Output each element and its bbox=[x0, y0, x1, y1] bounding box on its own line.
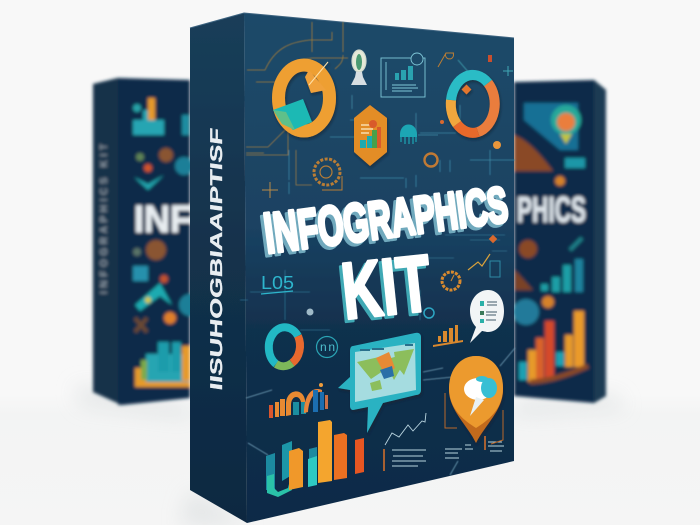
icon: orange arrow ring bbox=[273, 62, 330, 131]
small trend line bbox=[468, 254, 490, 270]
icon: teal donut small bbox=[269, 327, 300, 366]
small bars bbox=[515, 238, 583, 292]
box front face bbox=[244, 13, 514, 523]
title: INFOGRAPHICS: INFOGRAPHICS bbox=[257, 172, 508, 268]
icon: bar cluster bbox=[133, 98, 189, 135]
spine text: left box: INFOGRAPHICS KIT bbox=[99, 144, 110, 294]
lower chart bbox=[513, 296, 588, 382]
bar chart: large bbox=[266, 420, 364, 497]
back box: right bbox=[513, 80, 606, 403]
icon: circular m badge: nn bbox=[320, 340, 335, 354]
icon: map speech bubble bbox=[338, 333, 421, 433]
orange dot bbox=[493, 141, 501, 149]
line chart with rows bbox=[384, 413, 504, 471]
chart frame behind pin bbox=[445, 393, 503, 444]
icon: dashboard outline bbox=[381, 53, 425, 97]
icon: circular m badge bbox=[316, 336, 338, 358]
icon: small orange key bbox=[438, 53, 454, 67]
title: KIT: KIT bbox=[337, 238, 435, 336]
icon: small orange swirl bbox=[424, 154, 438, 166]
circuit lines bbox=[240, 22, 515, 475]
box spine bbox=[190, 13, 247, 523]
title: KIT: KIT bbox=[334, 241, 432, 339]
icon: small orange gauge bbox=[442, 272, 460, 290]
bar chart: small orange bbox=[433, 325, 463, 347]
icon: speech bubble list bbox=[470, 290, 504, 343]
LOS label: L05 bbox=[261, 273, 294, 293]
icon: lightbulb rocket bbox=[351, 50, 367, 85]
spine label: IISUHOGBIAAIPTISF bbox=[207, 127, 226, 392]
small teal badge bbox=[490, 261, 500, 277]
main box bbox=[190, 13, 515, 523]
icon: dots and chevron bbox=[134, 148, 193, 190]
icon: small red mark bbox=[488, 55, 492, 62]
small teal gear bbox=[424, 308, 434, 318]
icon: lower left shapes bbox=[133, 240, 201, 332]
back box: left bbox=[93, 78, 201, 405]
icon: orange location pin bbox=[449, 356, 503, 443]
map block and pin bbox=[514, 103, 585, 186]
floor shadows bbox=[75, 385, 625, 525]
cloud in pin bbox=[464, 376, 497, 416]
icon: teal head bbox=[400, 124, 438, 144]
orange diamond bbox=[489, 235, 497, 243]
plus marks bbox=[262, 182, 278, 198]
box top edge highlight bbox=[190, 13, 514, 38]
icon: donut ring bbox=[451, 75, 495, 133]
title fragment: right box: PHICS bbox=[517, 189, 586, 230]
bar chart: small arches bbox=[269, 383, 328, 418]
title fragment: left box: INF bbox=[134, 199, 192, 241]
bar chart: left box bbox=[135, 342, 190, 387]
title: INFOGRAPHICS: INFOGRAPHICS bbox=[260, 169, 511, 265]
icon: orange shield chart bbox=[354, 105, 387, 166]
icon: orange gear bbox=[314, 159, 342, 190]
